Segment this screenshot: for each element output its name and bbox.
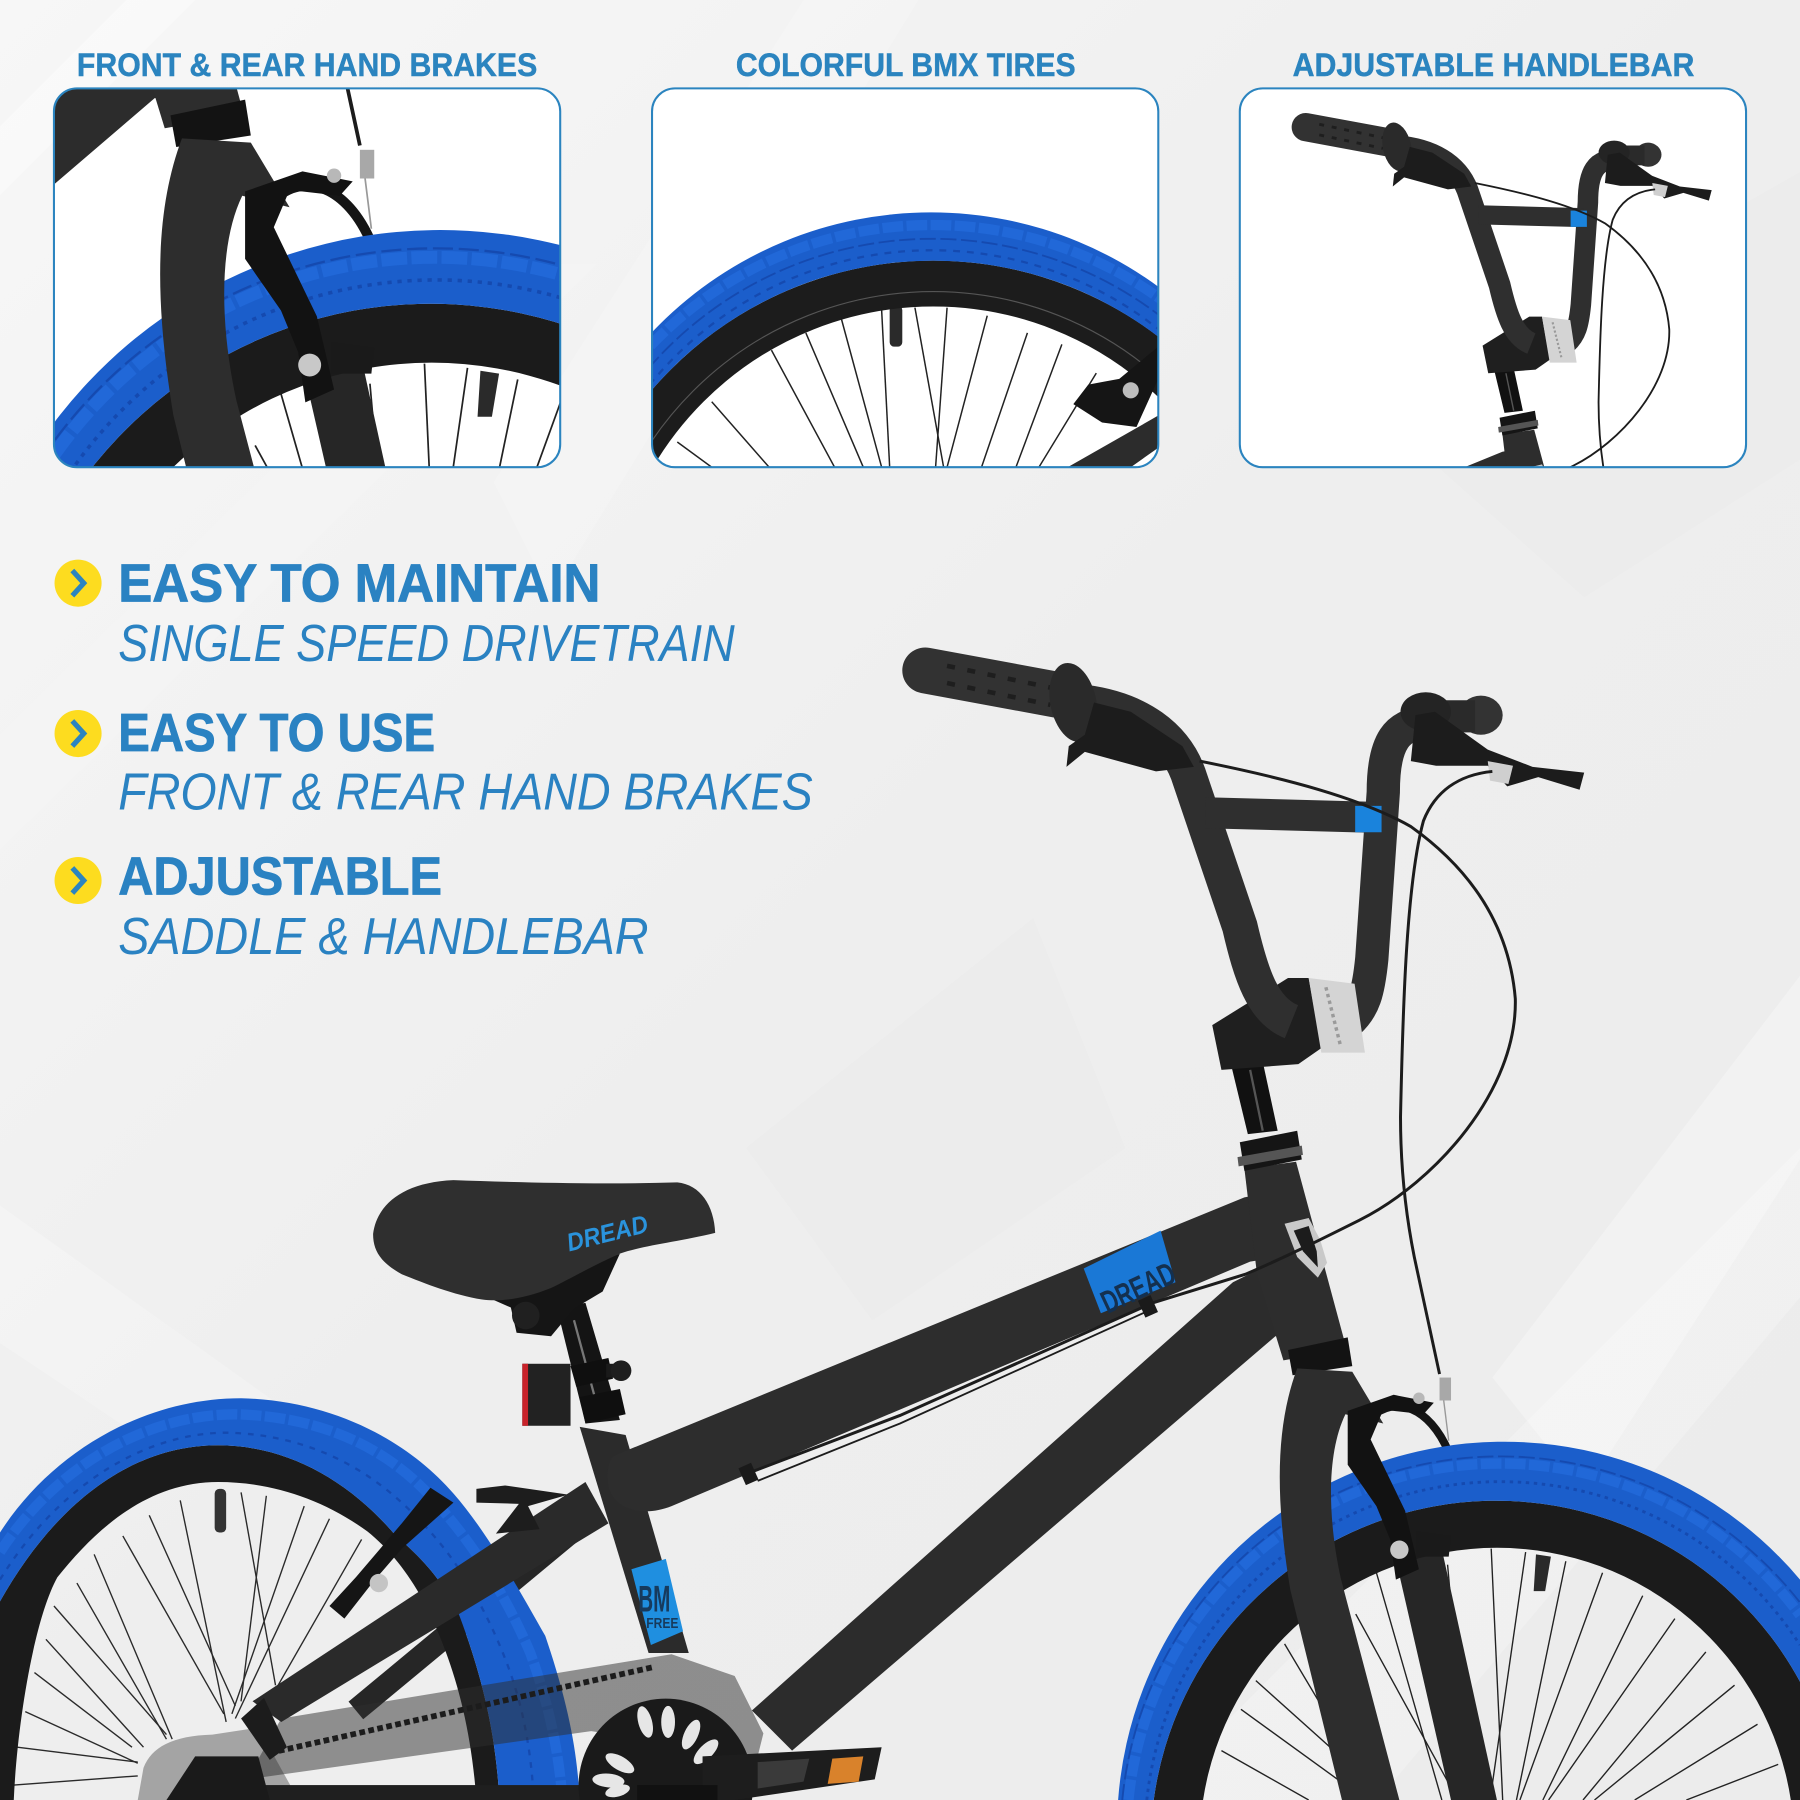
photo: tire close-up — [653, 90, 1158, 466]
pedal — [637, 1747, 882, 1800]
right grip — [1401, 692, 1503, 735]
stem — [1212, 978, 1321, 1070]
rear chain guard — [138, 1654, 763, 1800]
seat tube BMX label: FREE — [646, 1615, 678, 1632]
rear reflector — [522, 1364, 571, 1426]
feature list — [55, 554, 813, 965]
BMX bike illustration — [0, 658, 1800, 1800]
seat post and clamps — [557, 1303, 631, 1423]
inner seat stay — [356, 1515, 591, 1710]
seat tube BMX label: BM — [638, 1579, 670, 1620]
fork crown ring — [1288, 1337, 1352, 1375]
icon: yellow chevron bullet — [55, 710, 102, 757]
black sidewall and rim — [653, 260, 1158, 458]
heading: front and rear hand brakes: FRONT & REAR HAND BRAKES — [77, 47, 537, 83]
blue tire — [653, 212, 1158, 388]
left grip — [925, 658, 1104, 747]
rear spokes — [14, 1492, 362, 1785]
head tube — [1244, 1162, 1347, 1360]
rear brake — [329, 1485, 568, 1619]
rear blue tire — [0, 1398, 580, 1800]
left brake lever — [1066, 703, 1194, 771]
rear valve — [215, 1489, 226, 1533]
tire valve — [890, 305, 902, 347]
top tube DREAD label — [1084, 1231, 1181, 1321]
front blue tire — [1118, 1442, 1800, 1800]
rear tread — [0, 1414, 562, 1800]
feature: easy to maintain — [55, 554, 735, 672]
seat stay and dropout — [166, 1482, 608, 1800]
photo: handlebar close-up — [1241, 90, 1745, 466]
saddle mount — [482, 1254, 620, 1336]
icon: yellow chevron bullet — [55, 560, 102, 607]
feature: easy to use: FRONT & REAR HAND BRAKES — [118, 762, 813, 820]
rear brake and frame — [1069, 362, 1158, 466]
front wheel spokes — [1221, 1549, 1778, 1800]
feature: easy to maintain: EASY TO MAINTAIN — [118, 554, 600, 614]
front brake arm — [1348, 1378, 1451, 1580]
front sidewall and rim — [1154, 1501, 1800, 1800]
saddle: DREAD — [564, 1210, 651, 1257]
feature: easy to use: EASY TO USE — [118, 703, 435, 763]
feature: easy to maintain: SINGLE SPEED DRIVETRAIN — [118, 614, 735, 672]
feature: easy to use — [55, 703, 813, 820]
stem reflector — [1309, 978, 1365, 1053]
spokes — [677, 308, 1096, 467]
panel: colorful BMX tires — [651, 53, 1160, 468]
right brake lever — [1411, 712, 1584, 790]
heading: colorful BMX tires: COLORFUL BMX TIRES — [736, 47, 1076, 83]
rear fork leg — [1394, 1544, 1497, 1800]
seat tube BMX label — [631, 1559, 683, 1645]
down tube — [752, 1260, 1314, 1751]
photo: brake close-up — [55, 89, 560, 466]
feature: adjustable: ADJUSTABLE — [118, 846, 442, 906]
icon: yellow chevron bullet — [55, 857, 102, 904]
chainring — [579, 1699, 753, 1800]
feature: adjustable: SADDLE & HANDLEBAR — [118, 907, 649, 965]
steerer and headset — [1232, 1062, 1303, 1171]
panel: front and rear hand brakes — [52, 53, 562, 468]
panel: adjustable handlebar — [1238, 53, 1748, 468]
head badge — [1285, 1218, 1327, 1278]
rear sidewall and rim — [0, 1445, 499, 1800]
front valve — [1534, 1554, 1551, 1591]
front fork leg — [1280, 1368, 1399, 1800]
top tube — [608, 1194, 1272, 1511]
top tube DREAD label: DREAD — [1095, 1255, 1181, 1321]
chainstay — [235, 1785, 717, 1800]
feature: adjustable — [55, 846, 649, 965]
rear wheel — [0, 1398, 580, 1800]
heading: adjustable handlebar: ADJUSTABLE HANDLEBAR — [1293, 47, 1694, 83]
saddle — [373, 1180, 715, 1300]
cable clamps — [738, 1295, 1158, 1485]
brake arch — [1371, 1406, 1449, 1452]
seat tube — [580, 1427, 689, 1653]
brake cables — [746, 761, 1515, 1481]
handlebar — [1085, 703, 1435, 1022]
